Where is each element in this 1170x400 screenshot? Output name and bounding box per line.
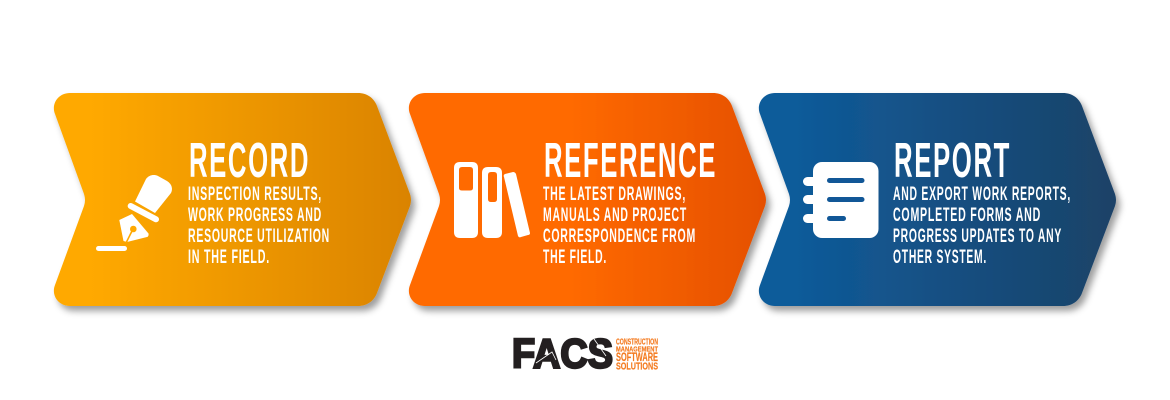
chevron: reference — [409, 93, 766, 306]
heading: reference: REFERENCE — [544, 134, 717, 188]
text: report description: COMPLETED FORMS AND — [893, 204, 1041, 226]
text: record description: RESOURCE UTILIZATION — [188, 225, 330, 247]
logo wordmark: FACS — [512, 330, 613, 376]
logo tagline: MANAGEMENT — [616, 344, 658, 353]
icon: books — [454, 162, 530, 238]
heading: record: RECORD — [189, 134, 310, 188]
logo tagline: CONSTRUCTION — [616, 337, 658, 347]
text: reference description: MANUALS AND PROJECT — [543, 204, 687, 226]
icon: notebook — [803, 162, 878, 238]
chevron: report — [759, 93, 1116, 306]
panel: report — [759, 93, 1116, 306]
logo: FACS — [512, 330, 658, 376]
logo tagline — [616, 337, 658, 372]
heading: report: REPORT — [894, 134, 1011, 188]
text: reference description: CORRESPONDENCE FROM — [543, 225, 696, 247]
logo tagline: SOFTWARE — [616, 350, 658, 364]
icon: fountain pen — [96, 175, 172, 251]
logo tagline: SOLUTIONS — [616, 361, 658, 372]
panel: record — [54, 93, 411, 306]
text: reference description: THE FIELD. — [543, 246, 607, 268]
text: report description: OTHER SYSTEM. — [893, 246, 987, 268]
text: reference description: THE LATEST DRAWINGS, — [543, 183, 686, 205]
text: record description: IN THE FIELD. — [188, 246, 270, 268]
chevron: record — [54, 93, 411, 306]
text: record description: WORK PROGRESS AND — [188, 204, 322, 226]
text: record description — [188, 183, 330, 268]
text: reference description — [543, 183, 696, 268]
panel: reference — [409, 93, 766, 306]
text: record description: INSPECTION RESULTS, — [188, 183, 322, 205]
text: report description — [893, 183, 1071, 268]
